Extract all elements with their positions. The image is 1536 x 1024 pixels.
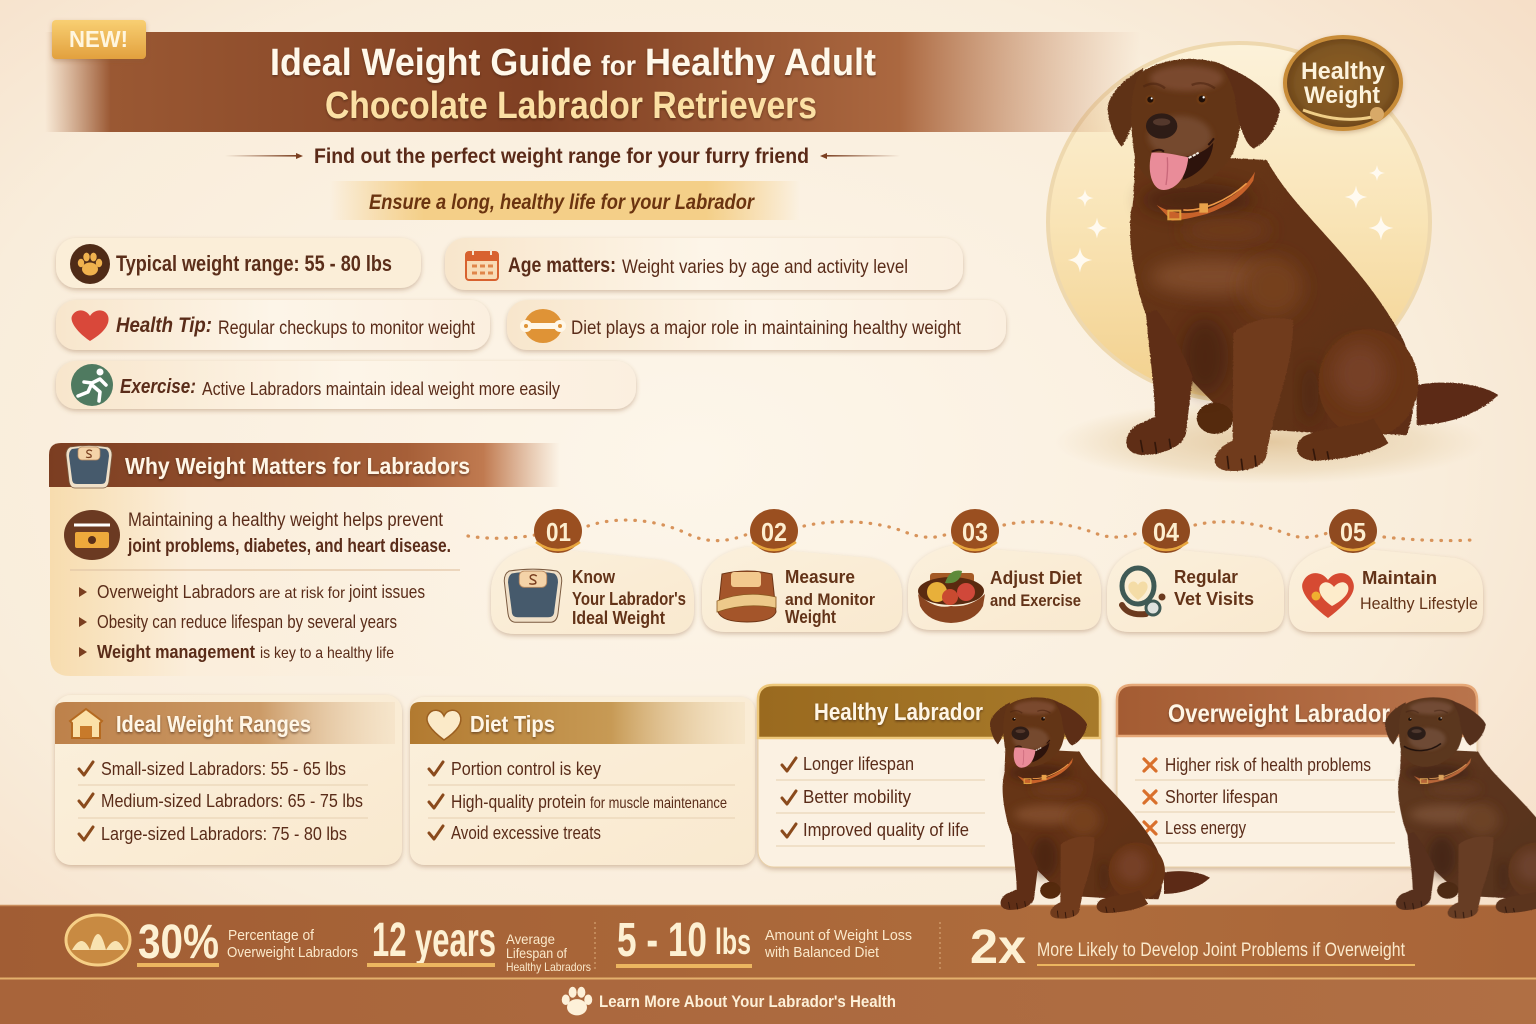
icon: scale badge — [64, 510, 120, 560]
heading — [55, 702, 395, 744]
panel: diet tips — [410, 697, 755, 865]
title text: Healthy Adult — [645, 42, 876, 84]
step number 02: 02 — [761, 517, 787, 547]
stat: 30 percent: Percentage of — [228, 927, 315, 944]
list — [1144, 755, 1371, 838]
step 02 card — [702, 509, 902, 632]
fact pill: age matters: Age matters: — [508, 254, 616, 277]
list: Better mobility — [803, 787, 911, 807]
intro text — [127, 510, 451, 557]
list: High-quality protein — [451, 792, 586, 812]
stat: 5 to 10 lbs: lbs — [715, 921, 751, 962]
icon: heart — [72, 310, 109, 341]
step 04 card: Regular — [1174, 567, 1238, 587]
title text: Ideal Weight Guide — [270, 42, 592, 84]
list: Longer lifespan — [803, 754, 914, 774]
heading: Diet Tips — [470, 711, 555, 737]
icon: orange bone — [520, 309, 566, 343]
step number 05 — [1329, 509, 1377, 553]
new tag — [52, 20, 146, 59]
footer stats band — [0, 905, 1536, 978]
heading — [758, 685, 1100, 738]
title banner — [45, 32, 1140, 132]
intro text: Maintaining a healthy weight helps prevent — [128, 510, 444, 531]
section heading — [49, 443, 560, 488]
stat: 5 to 10 lbs: 5 - 10 — [617, 914, 707, 967]
step 03 card — [908, 509, 1101, 630]
list: Small-sized Labradors: 55 - 65 lbs — [101, 759, 346, 779]
intro text: joint problems, diabetes, and heart disease. — [127, 536, 451, 557]
panel: healthy labrador — [758, 685, 1101, 867]
step 03 card: Adjust Diet — [990, 568, 1082, 588]
stat: 12 years: Average — [506, 931, 555, 947]
step 01 card: Your Labrador's — [572, 589, 686, 609]
step number 01: 01 — [546, 517, 571, 547]
step 01 card: Know — [572, 567, 616, 587]
list: Large-sized Labradors: 75 - 80 lbs — [101, 824, 347, 844]
step number 01 — [534, 509, 582, 553]
list: Shorter lifespan — [1165, 787, 1278, 807]
footer link bar — [0, 978, 1536, 1024]
stat: 2x: More Likely to Develop Joint Problems if Overweight — [1037, 940, 1406, 961]
list: Less energy — [1165, 818, 1246, 838]
step 02 card: and Monitor — [785, 590, 875, 609]
bullet list: is key to a healthy life — [260, 645, 394, 662]
fact pill: age matters: Weight varies by age and activity level — [622, 257, 908, 278]
list: Medium-sized Labradors: 65 - 75 lbs — [101, 791, 363, 811]
step 02 card: Measure — [785, 567, 855, 587]
bullet list: Overweight Labradors — [97, 582, 255, 602]
list — [429, 759, 727, 843]
badge: healthy weight: Weight — [1304, 82, 1380, 109]
hero illustration backdrop circle — [1048, 43, 1485, 484]
hero dog illustration — [1108, 59, 1498, 471]
subtitle: Find out the perfect weight range for your furry friend — [314, 145, 809, 168]
list: Avoid excessive treats — [451, 823, 601, 843]
fact pill: health tip: Health Tip: — [116, 314, 212, 337]
fact pill: exercise: Active Labradors maintain ideal weight more easily — [202, 379, 560, 399]
icon: food bowl — [918, 570, 985, 623]
bullet list — [79, 582, 425, 662]
fact pill: typical weight range — [56, 238, 421, 288]
step number 04: 04 — [1153, 517, 1179, 547]
step number 05: 05 — [1340, 517, 1366, 547]
list — [79, 759, 363, 844]
overweight labrador dog — [1385, 697, 1536, 919]
stat: 12 years: 12 years — [372, 914, 496, 967]
step number 04 — [1142, 509, 1190, 553]
step number 03: 03 — [962, 517, 988, 547]
stat: 12 years: Healthy Labradors — [506, 960, 591, 974]
stat: 2x — [970, 921, 1415, 974]
title text — [270, 42, 876, 127]
step 02 card: Weight — [785, 607, 836, 627]
stat: 5 to 10 lbs — [616, 914, 912, 968]
stat: 5 to 10 lbs: with Balanced Diet — [764, 944, 880, 961]
panel: ideal weight ranges — [55, 695, 402, 865]
tagline band: Ensure a long, healthy life for your Labrador — [369, 191, 756, 214]
step 05 card — [1289, 509, 1483, 632]
title text: Chocolate Labrador Retrievers — [325, 85, 817, 127]
heading: Overweight Labrador — [1168, 700, 1390, 728]
bullet list: are at risk for — [259, 585, 346, 602]
step 05 card: Healthy Lifestyle — [1360, 594, 1478, 613]
heading — [410, 702, 745, 744]
step number 03 — [951, 509, 999, 553]
bullet list: joint issues — [348, 582, 425, 602]
step 04 card — [1107, 509, 1284, 632]
fact pill: diet — [507, 300, 1006, 350]
stat: 5 to 10 lbs: Amount of Weight Loss — [765, 927, 912, 944]
list — [782, 754, 969, 840]
fact pill: health tip — [56, 300, 490, 350]
section heading: Why Weight Matters for Labradors — [125, 453, 470, 479]
step 05 card: Maintain — [1362, 568, 1437, 588]
icon: calendar — [466, 249, 498, 280]
step 03 card: and Exercise — [990, 591, 1081, 610]
list: Improved quality of life — [803, 820, 969, 840]
bullet list: Weight management — [97, 642, 255, 662]
icon: scale — [504, 569, 562, 622]
healthy labrador dog — [990, 697, 1210, 919]
icon: paw — [70, 244, 110, 284]
panel: why weight matters — [49, 443, 560, 676]
list: Portion control is key — [451, 759, 601, 779]
panel: overweight labrador — [1117, 685, 1477, 867]
step 01 card — [491, 509, 694, 634]
icon: heart — [1302, 573, 1354, 618]
heading — [1117, 685, 1477, 736]
badge: healthy weight: Healthy — [1301, 58, 1386, 85]
icon: stethoscope — [1122, 568, 1166, 615]
dotted connector — [468, 520, 1472, 541]
stat: 2x: 2x — [970, 921, 1026, 974]
fact pill: exercise — [56, 361, 636, 409]
stat: 12 years: Lifespan of — [506, 945, 567, 961]
list: Higher risk of health problems — [1165, 755, 1371, 775]
stat: 30 percent: 30% — [138, 916, 219, 969]
stat: 30 percent: Overweight Labradors — [227, 944, 358, 961]
fact pill: age matters — [445, 238, 963, 290]
fact pill: diet: Diet plays a major role in maintaining healthy weight — [571, 318, 962, 339]
fact pill: typical weight range: Typical weight range: 55 - 80 lbs — [116, 251, 392, 276]
list: for muscle maintenance — [590, 795, 727, 812]
fact pill: exercise: Exercise: — [120, 376, 196, 398]
title text: for — [601, 50, 636, 81]
bullet list: Obesity can reduce lifespan by several years — [97, 612, 397, 632]
icon: runner — [71, 364, 113, 406]
tagline band — [330, 181, 800, 220]
footer link bar: Learn More About Your Labrador's Health — [599, 992, 896, 1011]
step 01 card: Ideal Weight — [572, 608, 665, 628]
heading: Healthy Labrador — [814, 699, 983, 726]
new tag: NEW! — [69, 26, 128, 52]
badge: healthy weight — [1285, 37, 1401, 129]
stat: 30 percent — [66, 915, 358, 969]
step 04 card: Vet Visits — [1174, 589, 1254, 609]
icon: scale and tape measure — [717, 571, 776, 622]
fact pill: health tip: Regular checkups to monitor weight — [218, 318, 476, 339]
step number 02 — [750, 509, 798, 553]
heading: Ideal Weight Ranges — [116, 711, 311, 737]
